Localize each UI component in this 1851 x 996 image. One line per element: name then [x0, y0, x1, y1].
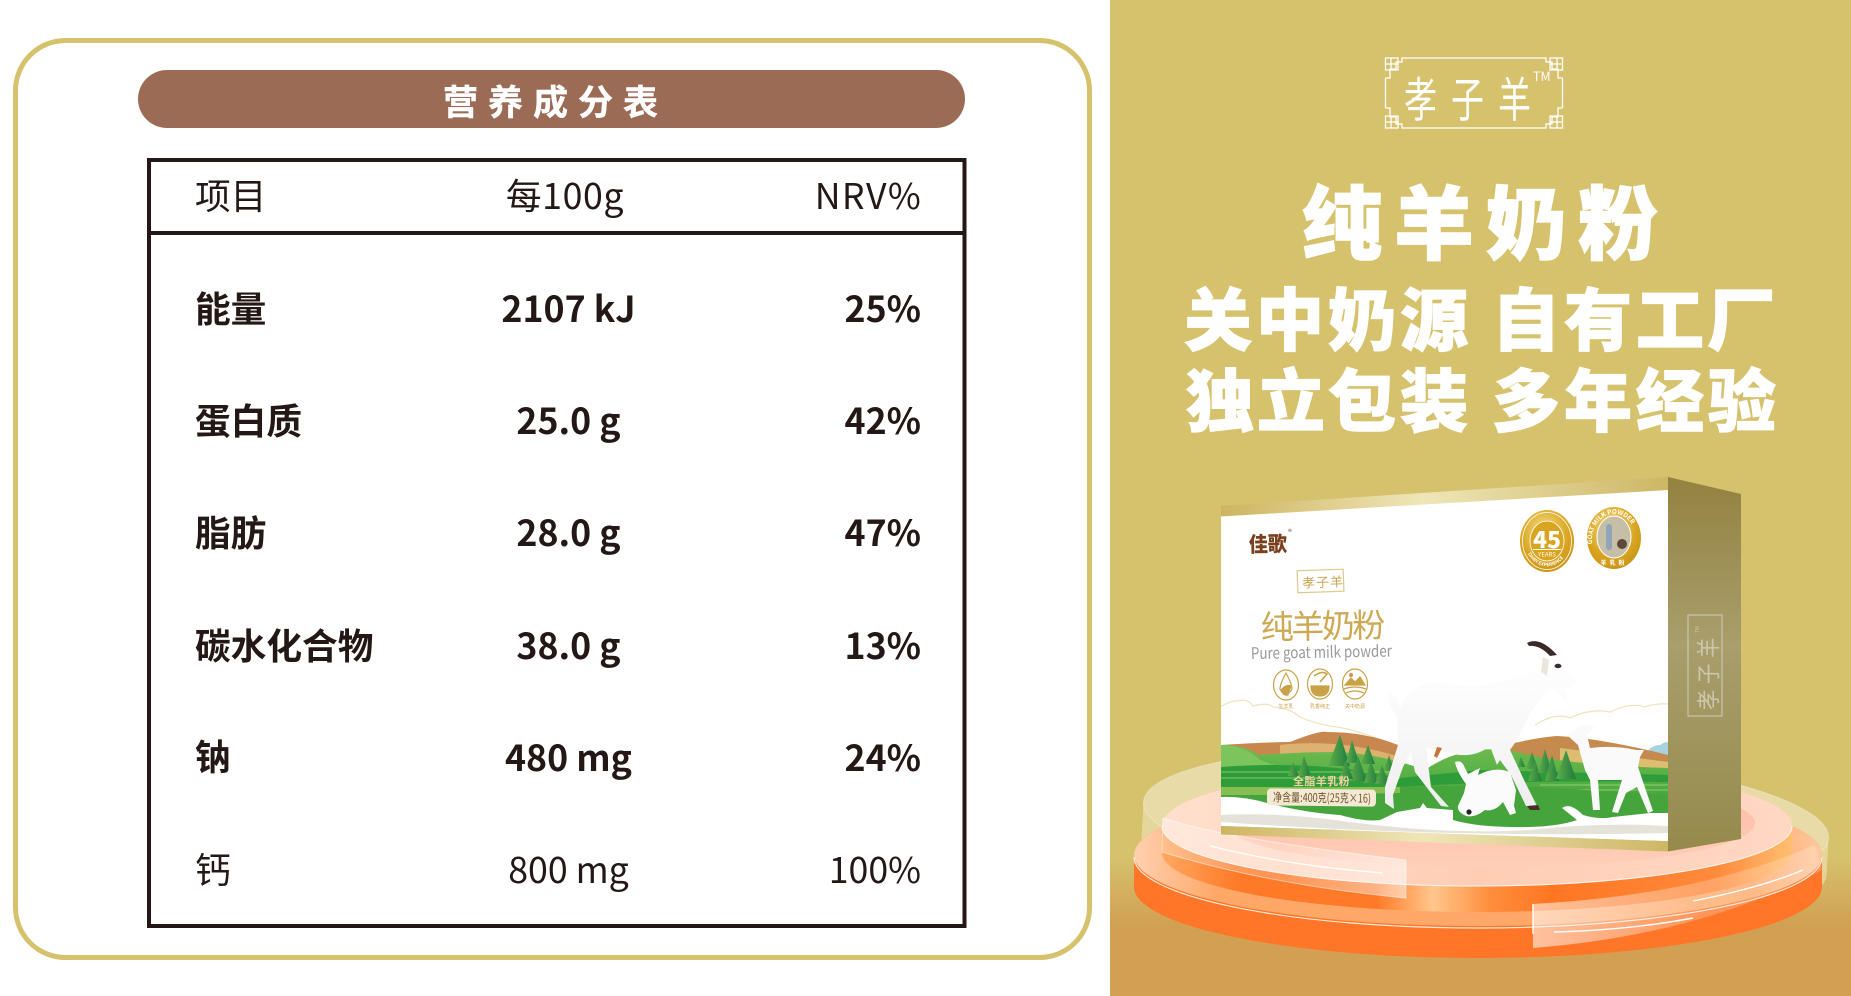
row: protein: 蛋白质 [195, 394, 302, 445]
medal: goat milk powder: 羊乳粉 [1600, 558, 1628, 567]
box net weight pill: 净含量:400克(25克×16) [1273, 788, 1371, 807]
row: sodium [195, 730, 921, 782]
row: carbohydrate [195, 619, 921, 670]
row: energy [195, 282, 921, 333]
row: calcium: 800 mg [508, 843, 629, 894]
panel: product promo [1110, 0, 1851, 996]
subhead line two: 独立包装 多年经验 [1186, 347, 1776, 446]
medal: goat milk powder: GOAT MILK POWDER [1587, 509, 1635, 544]
podium and product illustration [1133, 477, 1829, 958]
box side logo: TM [1694, 626, 1701, 633]
upper orange disc [1162, 764, 1792, 912]
brand logo [1386, 58, 1562, 131]
row: calcium: 100% [829, 843, 921, 894]
medal: 45 years: YEARS [1537, 550, 1556, 558]
lower orange disc [1134, 784, 1822, 958]
row: carbohydrate: 13% [845, 619, 921, 670]
table header row [195, 169, 922, 220]
band highlights [1210, 846, 1803, 934]
row: protein [195, 394, 921, 445]
box icon captions: 关中奶源 [1345, 703, 1365, 710]
row: sodium: 钠 [195, 730, 231, 781]
subhead line one: 关中奶源 自有工厂 [1184, 266, 1775, 365]
box side logo: 孝子羊 [1690, 632, 1725, 710]
row: fat: 脂肪 [195, 506, 266, 557]
clouds [1221, 700, 1668, 741]
row: energy: 25% [845, 282, 921, 333]
translucent band right [1533, 845, 1822, 948]
row: energy: 能量 [195, 282, 266, 333]
heading pill [138, 70, 965, 128]
nutrition table [149, 160, 964, 926]
row: sodium: 480 mg [505, 731, 632, 782]
medal: 45 years [1520, 510, 1574, 572]
trees [1288, 735, 1576, 784]
row: calcium [195, 843, 921, 894]
row: fat [195, 506, 921, 557]
product box [1220, 477, 1741, 852]
glass ring back [1138, 731, 1832, 946]
box side face [1668, 477, 1741, 852]
box fat label: 全脂羊乳粉 [1293, 773, 1350, 789]
medal: goat milk powder [1587, 507, 1641, 569]
icon: milk bowl [1308, 669, 1332, 699]
box english name: Pure goat milk powder [1251, 638, 1393, 664]
box small logo: 孝子羊 [1302, 571, 1344, 592]
box icon captions [1278, 703, 1365, 710]
medal: 45 years: 45 [1533, 521, 1561, 555]
box icon captions: 生羊乳 [1278, 703, 1294, 710]
box product name: 纯羊奶粉 [1260, 599, 1385, 649]
table header row: NRV% [815, 169, 922, 220]
row: energy: 2107 kJ [501, 282, 636, 333]
brand logo: 孝子羊 [1404, 61, 1531, 131]
blue sky patch [1648, 742, 1668, 755]
row: fat: 28.0 g [516, 506, 621, 557]
row: calcium: 钙 [195, 843, 231, 894]
row: carbohydrate: 38.0 g [516, 619, 621, 670]
panel: nutrition facts [0, 0, 1110, 996]
standing kid [1567, 724, 1653, 813]
row: fat: 47% [845, 506, 921, 557]
table header row: 每100g [506, 169, 624, 220]
box front face [1221, 477, 1668, 852]
box brand mark: ® [1288, 527, 1292, 538]
green fields [1221, 745, 1668, 830]
row: carbohydrate: 碳水化合物 [195, 619, 373, 670]
box brand mark: 佳歌 [1249, 528, 1288, 559]
row: protein: 42% [845, 394, 921, 445]
milk splash [1220, 797, 1668, 845]
main goat [1385, 641, 1578, 810]
table header row: 项目 [195, 169, 266, 220]
landscape artwork [1220, 700, 1668, 845]
icon: milk drop [1274, 670, 1298, 700]
heading pill: 营养成分表 [443, 75, 668, 126]
row: protein: 25.0 g [516, 394, 621, 445]
headline: 纯羊奶粉 [1302, 161, 1670, 277]
row: sodium: 24% [845, 731, 921, 782]
icon: mountains [1342, 669, 1368, 699]
brand logo: TM [1533, 66, 1551, 85]
nursing kid [1455, 761, 1516, 816]
translucent band left [1162, 818, 1406, 898]
box feature icons [1274, 669, 1368, 700]
hills [1222, 732, 1398, 756]
medal: 45 years: DAIRY EXPERIENCE [1528, 552, 1564, 566]
rounded gold panel border [16, 40, 1090, 958]
box icon captions: 乳香纯正 [1310, 703, 1330, 710]
